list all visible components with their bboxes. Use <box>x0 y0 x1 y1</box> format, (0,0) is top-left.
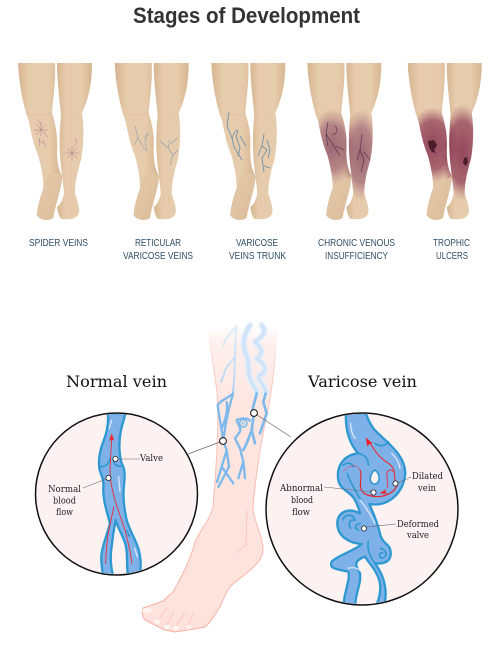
panel: trophic ulcers: ULCERS <box>436 250 468 262</box>
callout line: varicose <box>254 413 291 437</box>
label: RETICULAR <box>135 237 181 249</box>
label: SPIDER VEINS <box>29 237 88 249</box>
label: normal blood flow: flow <box>56 508 73 518</box>
discoloration <box>318 111 373 198</box>
label: CHRONIC VENOUS <box>318 237 395 249</box>
illustration: leg with veins <box>142 325 277 632</box>
label: normal blood flow: Normal <box>48 485 81 495</box>
panel: chronic venous insufficiency: INSUFFICIENCY <box>325 250 388 262</box>
marker: valve <box>113 456 118 462</box>
icon: ulcers <box>428 140 468 166</box>
panel: chronic venous insufficiency <box>307 63 395 262</box>
panel: varicose vein circle <box>266 413 458 608</box>
marker: varicose vein point <box>251 410 257 416</box>
label: abnormal blood flow: flow <box>292 508 310 518</box>
label: dilated vein: vein <box>417 484 436 494</box>
icon: dark veins <box>326 122 370 172</box>
label: dilated vein: Dilated <box>412 472 443 482</box>
marker: normal vein point <box>220 438 226 444</box>
callout line: normal <box>188 442 220 454</box>
vein <box>99 413 141 577</box>
marker: dilated vein <box>393 481 398 486</box>
panel: reticular varicose veins <box>115 63 193 262</box>
marker: abnormal flow <box>371 490 376 495</box>
label: TROPHIC <box>433 237 470 249</box>
discoloration <box>417 106 474 198</box>
panel: varicose veins trunk <box>211 63 286 262</box>
label lines <box>324 477 411 527</box>
heading: normal vein: Normal vein <box>66 372 167 391</box>
icon: trunk veins <box>227 112 270 172</box>
label: deformed valve: valve <box>406 531 429 541</box>
label: VARICOSE <box>236 237 278 249</box>
icon: reticular veins <box>134 126 178 165</box>
foot details <box>160 510 247 627</box>
panel: spider veins <box>18 63 92 249</box>
label: valve: Valve <box>139 454 163 464</box>
panel: trophic ulcers <box>407 63 485 262</box>
panel: reticular varicose veins: VARICOSE VEINS <box>123 250 193 262</box>
title: Stages of Development <box>133 3 361 28</box>
leg silhouette <box>142 325 277 632</box>
label lines <box>83 459 140 488</box>
label: abnormal blood flow: Abnormal <box>279 484 323 494</box>
label: abnormal blood flow: blood <box>291 496 313 506</box>
icon: spider vein marks <box>34 120 79 160</box>
marker: deformed valve <box>361 526 367 531</box>
label: normal blood flow: blood <box>53 496 76 506</box>
heading: varicose vein: Varicose vein <box>307 372 417 391</box>
toenails <box>142 608 192 630</box>
veins <box>217 325 267 487</box>
panel: normal vein circle <box>36 413 198 577</box>
panel: varicose veins trunk: VEINS TRUNK <box>229 250 286 262</box>
label: deformed valve: Deformed <box>397 520 439 530</box>
vein <box>331 413 405 608</box>
marker: blood flow <box>106 475 111 481</box>
